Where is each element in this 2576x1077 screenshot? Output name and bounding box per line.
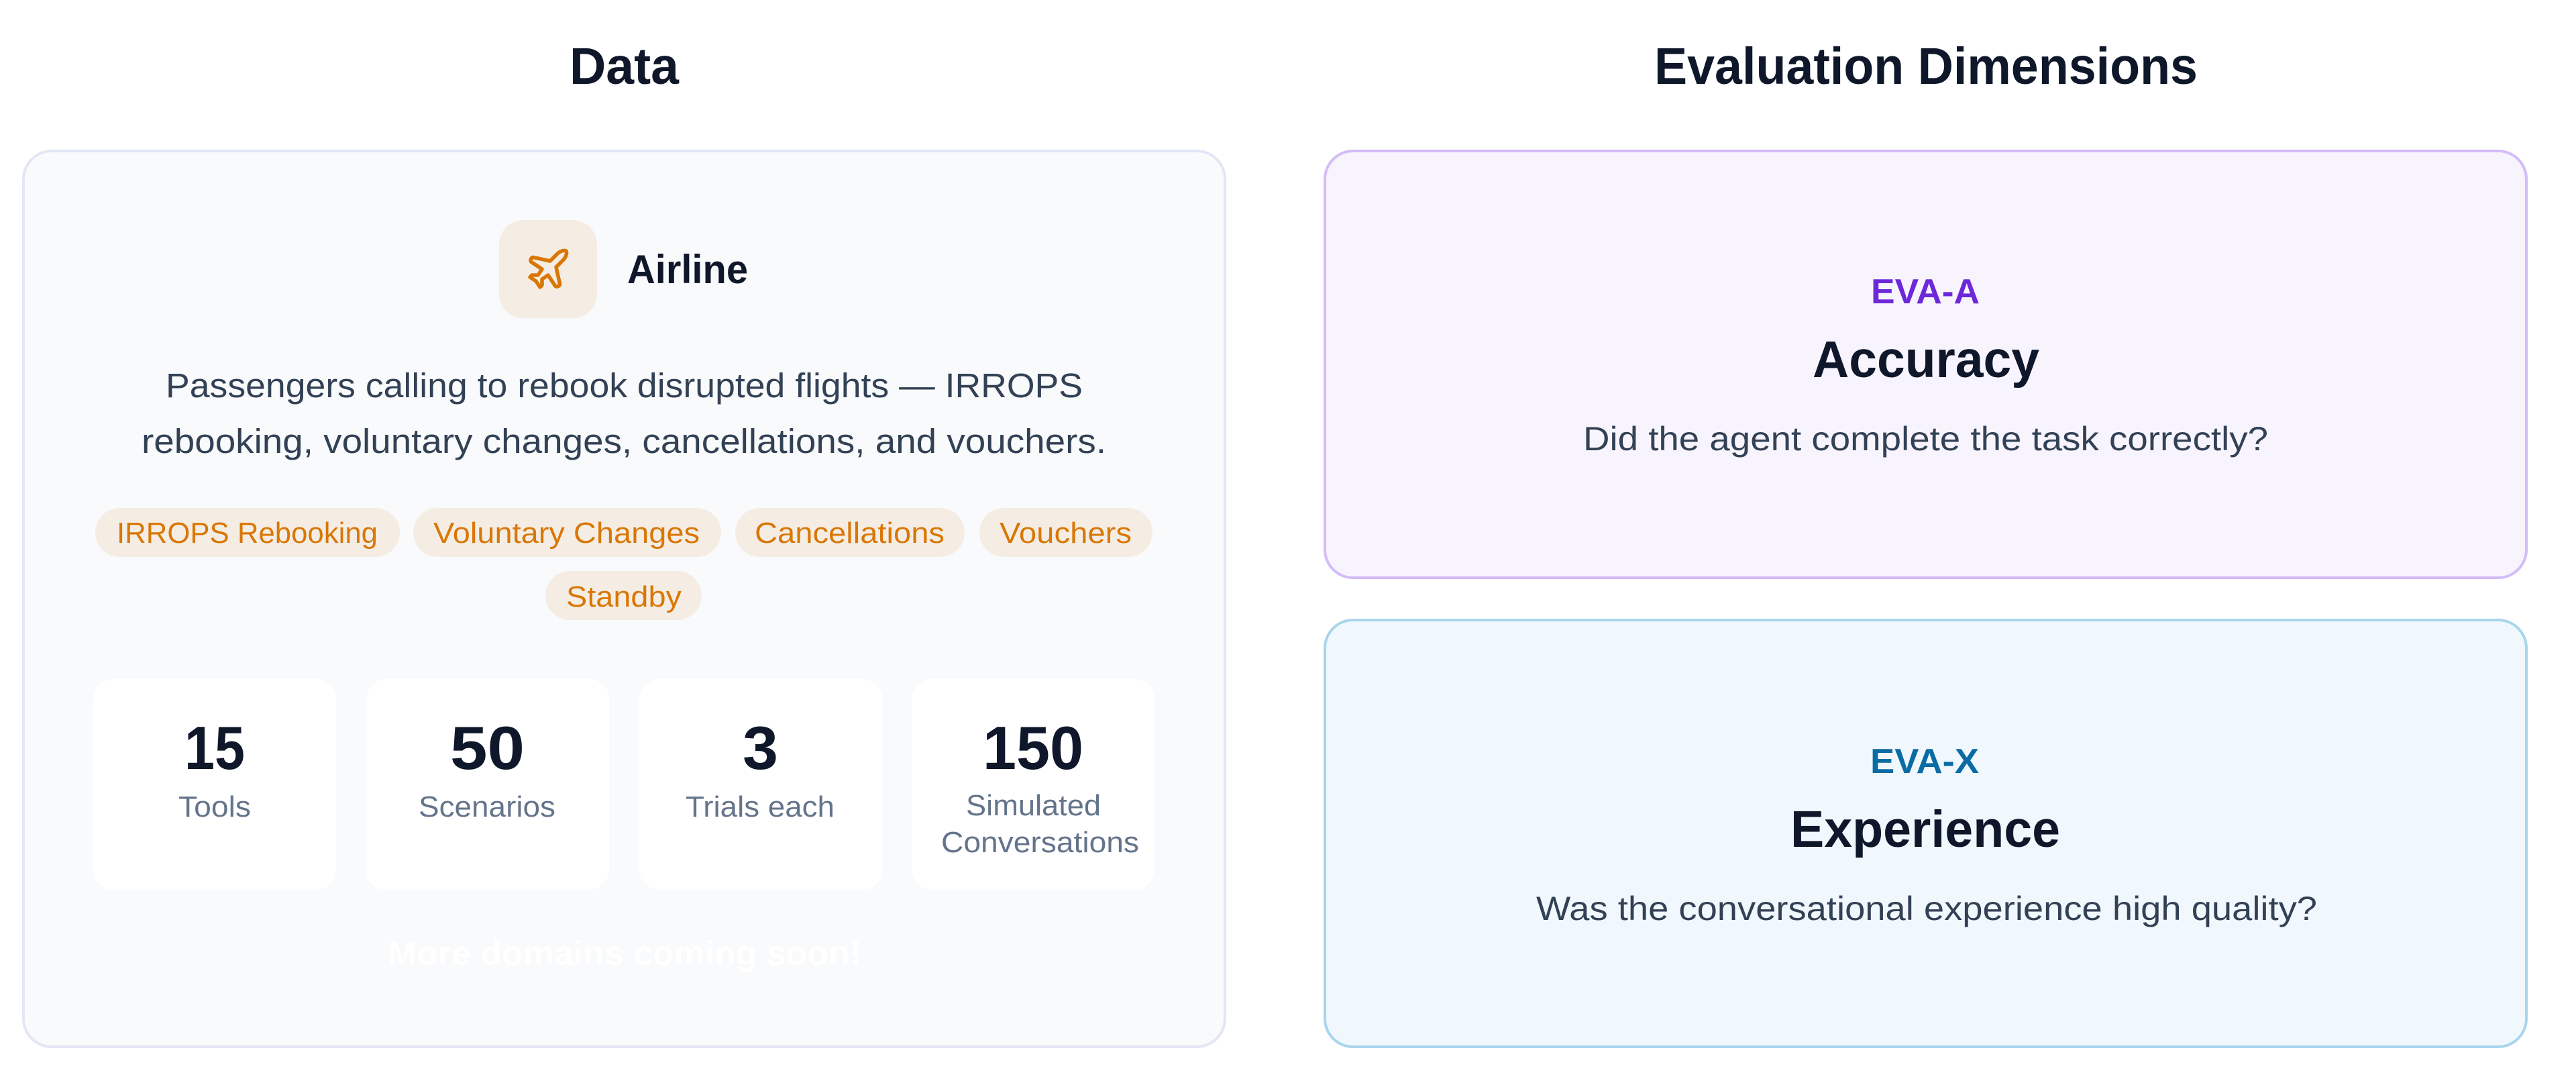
panel: EVA-A accuracy: EVA-A <box>1871 272 1980 311</box>
tag: Voluntary Changes <box>413 508 721 557</box>
panel: EVA-A accuracy <box>1325 151 2526 578</box>
note: more domains coming soon: More domains coming soon! <box>388 934 861 972</box>
stat card: trials each: 3 <box>743 715 778 782</box>
stat card: simulated conversations <box>912 679 1155 890</box>
domain description: rebooking, voluntary changes, cancellations, and vouchers. <box>142 422 1106 460</box>
domain description: Passengers calling to rebook disrupted flights — IRROPS <box>166 366 1083 405</box>
stat card: trials each <box>639 679 882 890</box>
heading: Data: Data <box>570 38 680 95</box>
panel: data <box>23 151 1225 1047</box>
stat card: scenarios <box>366 679 609 890</box>
icon: airplane <box>499 220 597 318</box>
domain description <box>142 366 1106 460</box>
stat card: scenarios: Scenarios <box>419 790 555 823</box>
stat card: tools <box>93 679 336 890</box>
panel: EVA-X experience: Was the conversational experience high quality? <box>1536 890 2317 927</box>
tag: IRROPS Rebooking <box>95 508 400 557</box>
tag: Cancellations: Cancellations <box>755 517 945 550</box>
heading: Evaluation Dimensions: Evaluation Dimensions <box>1654 38 2198 95</box>
tag: IRROPS Rebooking: IRROPS Rebooking <box>117 517 378 550</box>
panel: EVA-X experience: Experience <box>1790 801 2060 858</box>
tag: Voluntary Changes: Voluntary Changes <box>433 517 700 550</box>
tag: Standby <box>545 571 702 620</box>
tag: Vouchers <box>979 508 1152 557</box>
domain name: Airline: Airline <box>627 247 748 292</box>
panel: EVA-A accuracy: Accuracy <box>1813 331 2039 389</box>
panel: EVA-X experience: EVA-X <box>1870 742 1979 781</box>
panel: EVA-X experience <box>1325 620 2526 1047</box>
stat card: simulated conversations: 150 <box>983 715 1083 782</box>
tag: Cancellations <box>735 508 965 557</box>
stat card: tools: Tools <box>178 790 251 823</box>
stat card: scenarios: 50 <box>450 715 525 782</box>
tag: Vouchers: Vouchers <box>1000 517 1132 550</box>
stat card: simulated conversations: Simulated <box>966 789 1101 822</box>
panel: EVA-A accuracy: Did the agent complete the task correctly? <box>1583 420 2268 458</box>
stat card: trials each: Trials each <box>686 790 835 823</box>
tag: Standby: Standby <box>566 580 682 613</box>
stat card: tools: 15 <box>184 715 245 782</box>
stat card: simulated conversations: Conversations <box>941 826 1139 859</box>
